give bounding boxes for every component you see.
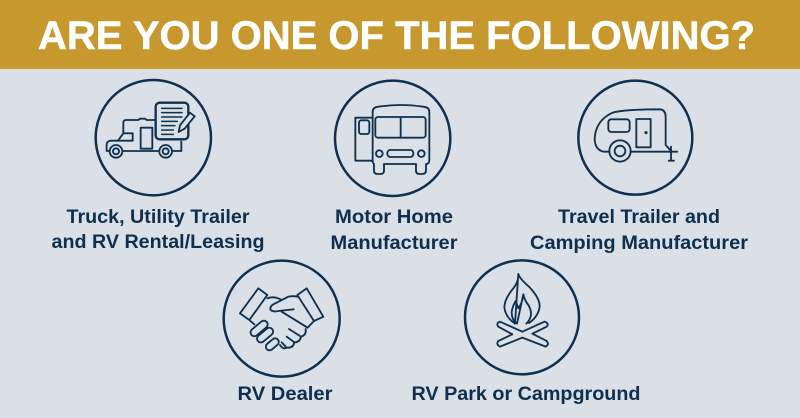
label: travel trailer: Travel Trailer and xyxy=(558,207,720,228)
icon: motor home front view xyxy=(335,81,450,196)
title: ARE YOU ONE OF THE FOLLOWING? xyxy=(38,14,755,58)
label: truck rental xyxy=(52,207,264,253)
label: motor home: Manufacturer xyxy=(330,233,458,254)
label: travel trailer: Camping Manufacturer xyxy=(530,233,749,254)
label: RV dealer: RV Dealer xyxy=(238,384,333,405)
icon: RV with rental document xyxy=(96,80,211,195)
label: motor home xyxy=(330,207,458,254)
label: truck rental: Truck, Utility Trailer xyxy=(66,207,250,228)
header band xyxy=(0,0,800,69)
icon: campfire xyxy=(465,260,579,374)
label: RV park: RV Park or Campground xyxy=(412,384,640,405)
icon: handshake xyxy=(224,261,340,377)
label: motor home: Motor Home xyxy=(335,207,453,228)
label: travel trailer xyxy=(530,207,749,254)
label: truck rental: and RV Rental/Leasing xyxy=(52,232,264,253)
icon: travel trailer xyxy=(578,81,692,195)
